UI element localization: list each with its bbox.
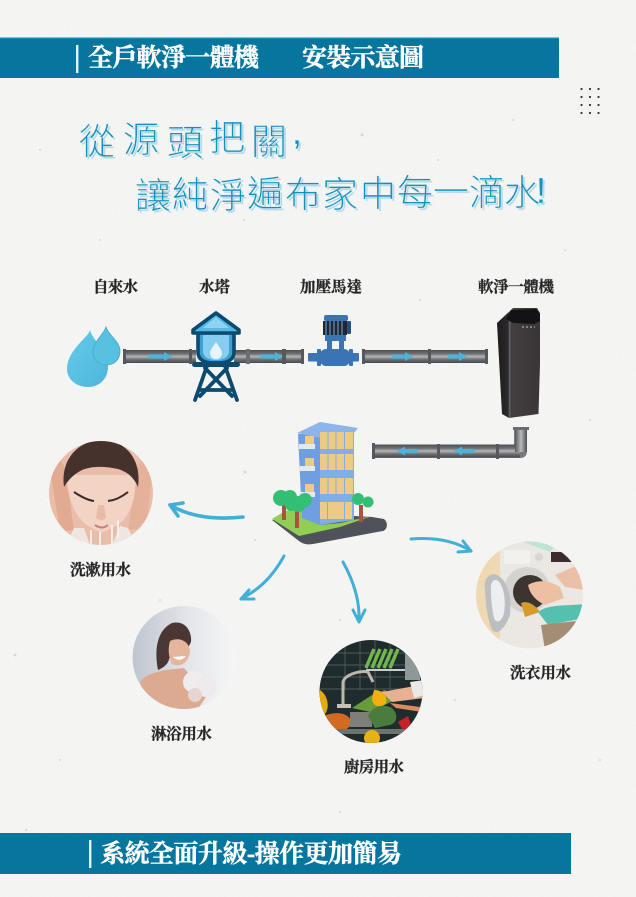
top header bar: 安裝示意圖 xyxy=(302,43,424,72)
photo: kitchen xyxy=(318,639,424,746)
handwritten slogan: 讓純淨遍布家中每一滴水! xyxy=(135,170,546,216)
top header bar: 全戶軟淨一體機 xyxy=(88,43,260,72)
arrow: to kitchen xyxy=(343,562,365,622)
handwritten slogan xyxy=(79,111,548,218)
photo: laundry xyxy=(475,541,585,650)
label: water tower: 水塔 xyxy=(199,278,230,296)
label: booster pump: 加壓馬達 xyxy=(300,277,362,296)
handwritten slogan: 讓純淨遍布家中每一滴水! xyxy=(137,172,548,218)
handwritten slogan: 從源頭把關, xyxy=(81,113,304,165)
photo: face washing xyxy=(49,440,153,546)
label: tap water: 自來水 xyxy=(93,278,138,296)
bottom header bar xyxy=(0,833,571,874)
label: purifier: 軟淨一體機 xyxy=(478,277,554,296)
label: laundry water: 洗衣用水 xyxy=(510,663,571,682)
photo: shower xyxy=(132,606,216,709)
label: face washing water: 洗漱用水 xyxy=(70,560,131,579)
pipe: purifier to building xyxy=(372,427,529,459)
icon: booster pump xyxy=(308,315,359,366)
bottom header bar: 系統全面升級-操作更加簡易 xyxy=(100,840,402,868)
icon: apartment building xyxy=(272,422,387,544)
decorative dot grid icon xyxy=(580,88,600,114)
handwritten slogan: 從源頭把關, xyxy=(79,111,302,163)
arrow: to laundry xyxy=(411,538,471,552)
pipe: source to tower xyxy=(123,349,196,364)
pipe: tower to pump xyxy=(234,349,304,364)
label: kitchen water: 廚房用水 xyxy=(344,757,404,776)
icon: water tower xyxy=(192,313,240,400)
top header bar xyxy=(0,37,559,78)
icon: water drops xyxy=(67,327,120,387)
arrow: to face washing xyxy=(170,503,243,518)
pipe: pump to purifier xyxy=(362,349,488,364)
label: shower water: 淋浴用水 xyxy=(151,725,212,743)
arrow: to shower xyxy=(241,556,284,599)
icon: whole-house purifier xyxy=(497,308,540,418)
